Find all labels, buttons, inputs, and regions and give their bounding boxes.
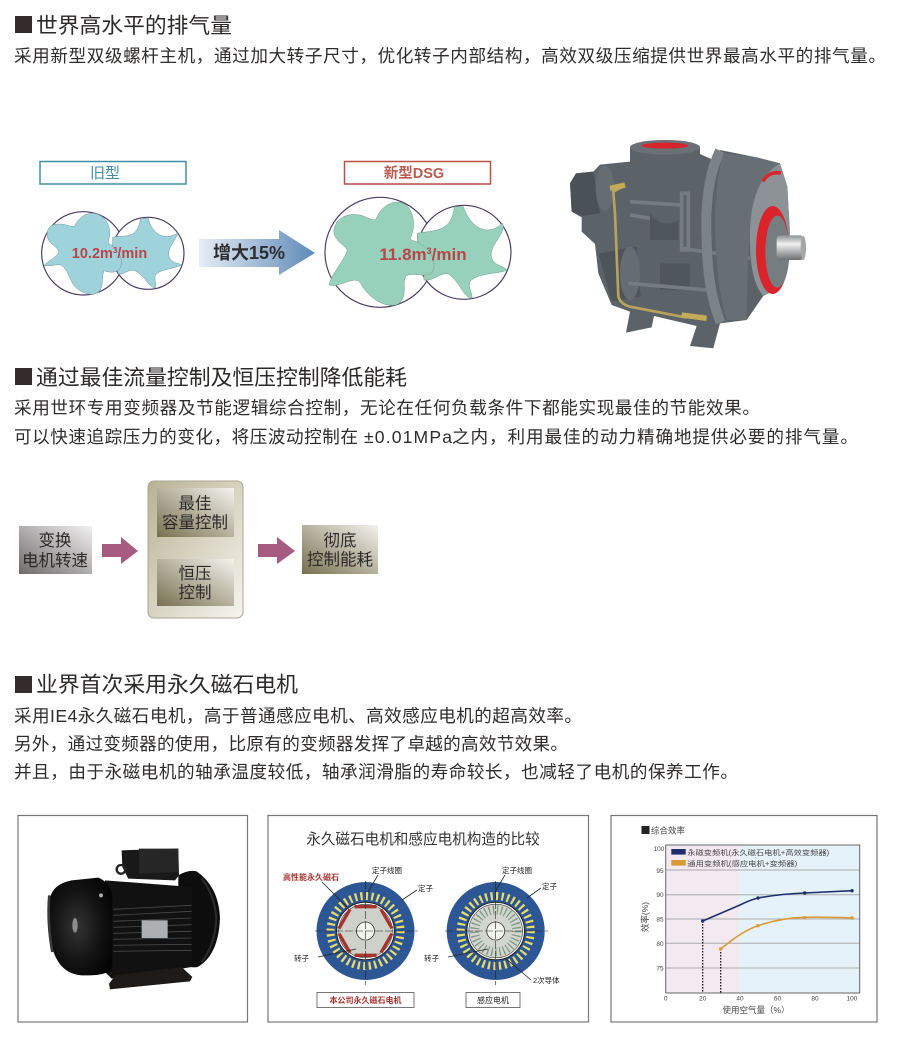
photo: permanent magnet motor (48, 849, 220, 989)
flow box: constant pressure control (157, 559, 234, 606)
y axis ticks: 100 (654, 846, 665, 853)
heading: section 3: 业界首次采用永久磁石电机 (36, 673, 298, 697)
callouts: left motor labels (283, 865, 433, 963)
chart legend: 通用变频机(感应电机+变频器) (687, 859, 797, 868)
diagram: permanent magnet motor cross-section (315, 881, 418, 985)
chart legend (671, 848, 829, 868)
flow box: thorough energy control: 彻底 (324, 531, 356, 550)
x axis title: 使用空气量（%） (722, 1005, 790, 1015)
text block: section 3 description (14, 706, 738, 782)
chart legend: 永磁变频机(永久磁石电机+高效变频器) (687, 848, 829, 857)
callouts: right motor labels: 转子 (424, 953, 439, 963)
callouts: right motor labels: 定子 (542, 881, 557, 891)
label: our permanent magnet motor (317, 992, 414, 1008)
flow box: change motor speed: 电机转速 (22, 551, 88, 570)
arrow: increase 15% (199, 230, 315, 275)
callouts: left motor labels: 高性能永久磁石 (283, 872, 339, 882)
diagram: new DSG rotor profile: /min (432, 245, 467, 264)
series: general inverter (719, 916, 854, 951)
text block: section 3 description: 另外，通过变频器的使用，比原有的变频器发挥了卓越的高效节效果。 (14, 734, 568, 754)
chart heading: 综合效率 (651, 826, 686, 836)
label: induction motor: 感应电机 (477, 995, 509, 1005)
diagram: new DSG rotor profile: 11.8m (379, 245, 427, 264)
panel: motor photo (18, 816, 248, 1022)
flow box: optimal capacity control: 容量控制 (162, 513, 228, 532)
arrow: flow step 2 (258, 537, 295, 564)
x axis ticks: 100 (847, 996, 858, 1002)
diagram: old rotor profile: 3 (113, 246, 118, 255)
arrow: flow step 1 (102, 537, 138, 564)
x axis ticks: 20 (699, 996, 707, 1002)
diagram: new DSG rotor profile (325, 197, 511, 307)
diagram: old rotor profile (42, 212, 184, 295)
heading: section 2: 通过最佳流量控制及恒压控制降低能耗 (36, 366, 407, 390)
callouts: right motor labels: 2次导体 (533, 975, 560, 985)
flow box: thorough energy control (302, 525, 378, 574)
flow group: control methods (148, 481, 243, 618)
diagram: old rotor profile: 10.2m (72, 246, 113, 262)
text block: section 2 description: 之内，利用最佳的动力精确地提供必要的排气量。 (452, 427, 858, 447)
series: permanent magnet inverter (701, 889, 854, 923)
y axis ticks: 95 (656, 868, 664, 875)
panel title: 永久磁石电机和感应电机构造的比较 (306, 830, 540, 848)
flow box: constant pressure control: 控制 (178, 583, 212, 602)
callouts: right motor labels (424, 865, 560, 985)
diagram: old rotor profile: /min (117, 246, 147, 262)
text block: section 2 description: 可以快速追踪压力的变化，将压波动控制在 (14, 427, 358, 447)
line chart (640, 845, 860, 1015)
callouts: left motor labels: 定子 (418, 883, 433, 893)
callouts: right motor labels: 定子线圈 (502, 865, 532, 875)
x axis ticks: 80 (811, 996, 819, 1002)
label: our permanent magnet motor: 本公司永久磁石电机 (330, 995, 402, 1005)
panel: overall efficiency chart (611, 816, 877, 1022)
x axis ticks: 40 (736, 996, 744, 1002)
label: new model DSG: 新型DSG (384, 164, 444, 182)
x axis ticks: 60 (774, 996, 781, 1002)
heading: section 1: 世界高水平的排气量 (36, 14, 232, 38)
callouts: left motor labels: 定子线圈 (372, 865, 402, 875)
label: new model DSG (344, 162, 490, 184)
text block: section 2 description (14, 398, 858, 447)
text block: section 1 description: 采用新型双级螺杆主机，通过加大转子尺寸，优化转子内部结构，高效双级压缩提供世界最高水平的排气量。 (14, 46, 886, 66)
panel: motor structure comparison (268, 816, 588, 1022)
y axis title: 效率(%) (640, 902, 650, 932)
y axis ticks (654, 846, 665, 972)
text block: section 2 description: 采用世环专用变频器及节能逻辑综合控制，无论在任何负载条件下都能实现最佳的节能效果。 (14, 398, 760, 418)
x axis ticks (664, 996, 858, 1002)
text block: section 2 description: ±0.01MPa (364, 427, 452, 447)
flow box: change motor speed (19, 526, 92, 574)
photo: twin-stage screw air end (570, 140, 806, 348)
text block: section 3 description: 并且，由于永磁电机的轴承温度较低，轴承润滑脂的寿命较长，也减轻了电机的保养工作。 (14, 762, 738, 782)
y axis ticks: 85 (656, 916, 664, 924)
label: old model: 旧型 (90, 165, 120, 182)
y axis ticks: 75 (656, 966, 664, 972)
flow box: thorough energy control: 控制能耗 (307, 550, 373, 569)
callouts: left motor labels: 转子 (294, 953, 309, 963)
diagram: induction motor cross-section (445, 881, 548, 985)
label: induction motor (466, 992, 520, 1008)
text block: section 3 description: 采用IE4永久磁石电机，高于普通感应电机、高效感应电机的超高效率。 (14, 706, 582, 726)
y axis ticks: 90 (656, 892, 664, 899)
x axis ticks: 0 (664, 996, 668, 1002)
flow box: optimal capacity control: 最佳 (178, 494, 212, 513)
diagram: new DSG rotor profile: 3 (427, 246, 432, 256)
flow box: constant pressure control: 恒压 (178, 564, 212, 583)
flow box: change motor speed: 变换 (38, 531, 72, 550)
y axis ticks: 80 (656, 941, 664, 948)
flow box: optimal capacity control (157, 488, 234, 537)
label: old model (40, 162, 186, 184)
arrow: increase 15%: 增大15% (213, 243, 285, 263)
